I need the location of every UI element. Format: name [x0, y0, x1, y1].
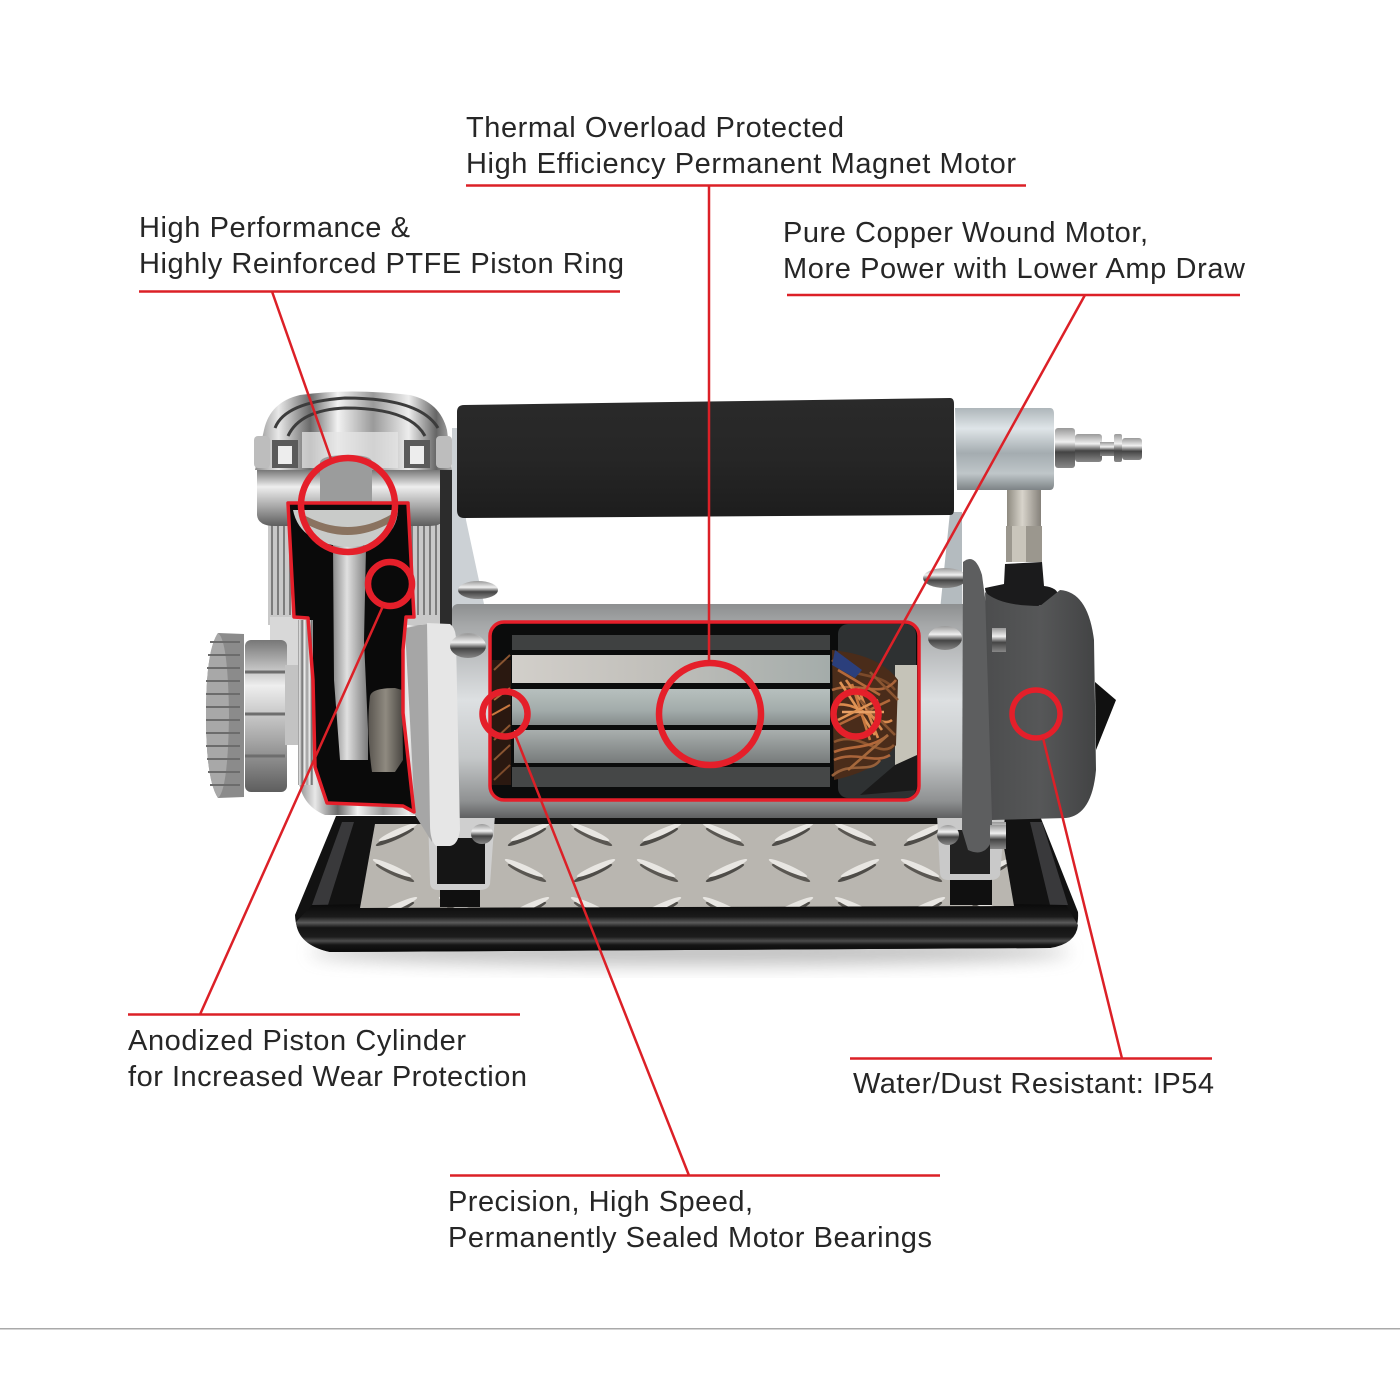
callout: piston cylinder	[128, 606, 527, 1093]
copper windings left	[492, 655, 511, 785]
text: bearings: Precision, High Speed,	[448, 1186, 753, 1218]
flywheel	[368, 688, 403, 772]
end cap flange	[962, 559, 992, 852]
handle bracket right	[940, 512, 962, 610]
rubber boot	[985, 562, 1058, 608]
text: motor: Thermal Overload Protected	[466, 112, 844, 144]
callout ring: motor	[659, 663, 761, 765]
text: piston cylinder: Anodized Piston Cylinder	[128, 1025, 466, 1057]
text: piston cylinder: for Increased Wear Protection	[128, 1061, 527, 1093]
crankcase	[298, 625, 440, 815]
text: piston ring: Highly Reinforced PTFE Piston Ring	[139, 248, 624, 280]
cooling block right	[440, 470, 452, 640]
callout: motor	[466, 112, 1026, 662]
text: bearings: Permanently Sealed Motor Bearings	[448, 1222, 932, 1254]
callout: water resistance	[850, 738, 1214, 1100]
text: piston ring: High Performance &	[139, 212, 410, 244]
motor cutaway window	[490, 622, 919, 800]
cap studs	[990, 628, 1006, 849]
text: piston ring	[139, 212, 624, 280]
vertical fitting	[1006, 490, 1042, 562]
callout: bearings	[448, 737, 940, 1254]
cylinder head base	[257, 470, 447, 526]
callout ring: cylinder	[368, 562, 412, 606]
leader: copper motor	[787, 295, 1240, 692]
end cap	[985, 590, 1096, 820]
callout ring: bearings	[482, 692, 528, 736]
copper windings right	[832, 650, 898, 780]
cutaway outline: piston cylinder	[288, 503, 414, 812]
cutaway outline: motor window	[490, 622, 919, 800]
callout: piston ring	[139, 212, 624, 459]
piston	[293, 455, 398, 547]
leader: piston cylinder	[128, 606, 520, 1014]
callout ring: IP54 cap	[1012, 690, 1060, 738]
handle bracket left	[452, 428, 484, 610]
adjustment knob	[206, 620, 313, 798]
diamond plate	[360, 824, 1014, 908]
right mounting foot	[937, 815, 1006, 905]
leader: bearings	[450, 737, 940, 1176]
ground shadow	[310, 939, 1070, 965]
cylinder head cover	[254, 392, 452, 470]
rubber base	[295, 816, 1078, 952]
callout ring: piston ring	[301, 458, 395, 552]
stator bars	[512, 635, 830, 787]
callout ring: copper winding	[834, 692, 878, 736]
leader: water resistance	[850, 738, 1212, 1058]
text: bearings	[448, 1186, 932, 1254]
callout: copper motor	[783, 217, 1246, 692]
text: copper motor	[783, 217, 1246, 285]
leader: piston ring	[139, 292, 620, 459]
motor housing	[452, 604, 982, 818]
text: copper motor: Pure Copper Wound Motor,	[783, 217, 1148, 249]
foam handle	[457, 398, 954, 518]
capacitor	[832, 650, 862, 678]
text: copper motor: More Power with Lower Amp Draw	[783, 253, 1246, 285]
text: motor: High Efficiency Permanent Magnet Motor	[466, 148, 1016, 180]
cutaway cavity	[288, 503, 414, 812]
connecting rod	[333, 541, 368, 760]
outlet manifold	[955, 408, 1054, 490]
quick connect plug	[1055, 428, 1142, 468]
front bracket plate	[405, 623, 486, 846]
cylinder fins	[268, 525, 440, 672]
text: motor	[466, 112, 1016, 180]
rocker switch	[1095, 682, 1116, 750]
motor bolts	[451, 568, 967, 657]
text: piston cylinder	[128, 1025, 527, 1093]
left mounting foot	[428, 815, 495, 907]
compressor illustration	[206, 392, 1142, 952]
leader: motor	[466, 186, 1026, 662]
text: water resistance: Water/Dust Resistant: IP54	[853, 1068, 1214, 1100]
